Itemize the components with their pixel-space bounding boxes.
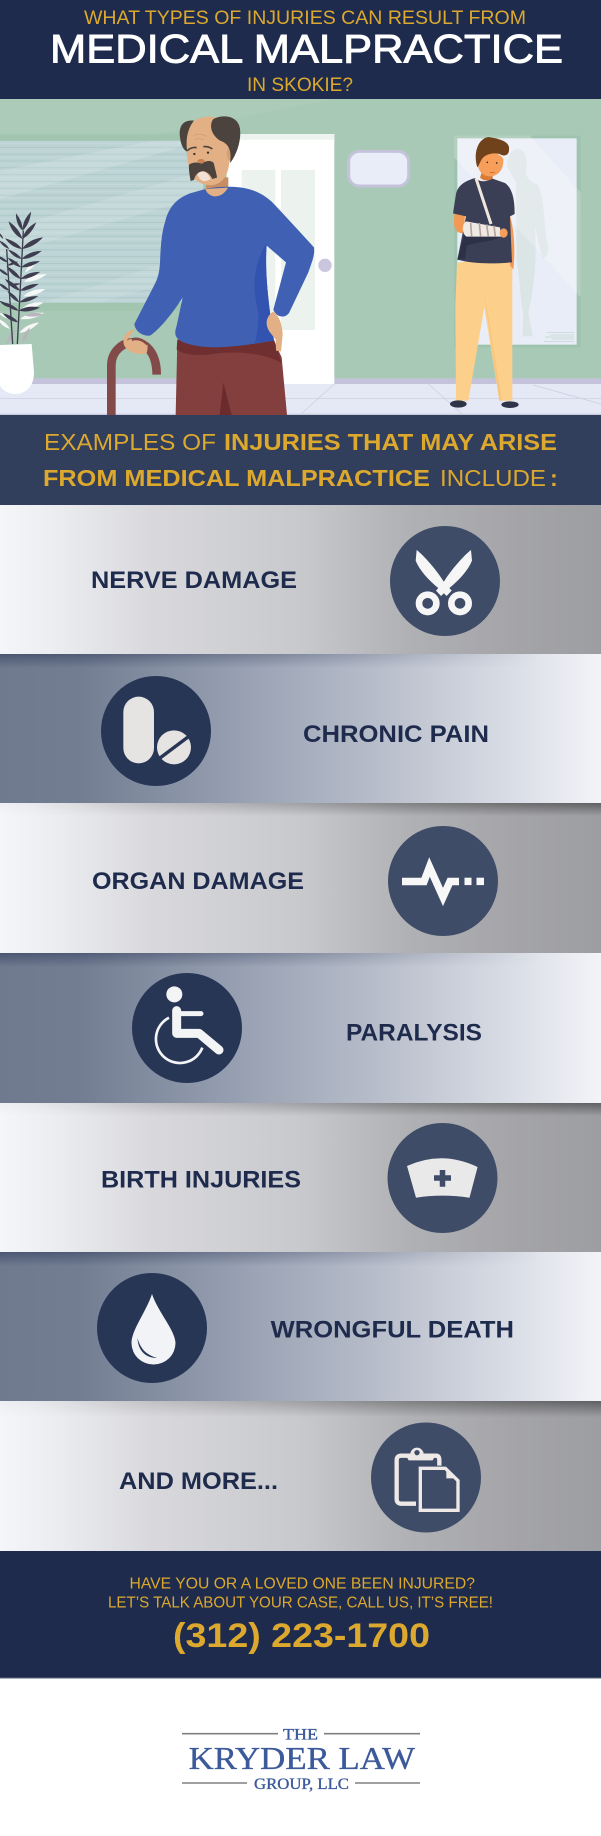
banner text line 2: FROM MEDICAL MALPRACTICE [43,465,430,491]
potted plant [0,211,48,394]
wall poster [454,136,581,347]
neck and head [480,172,493,181]
band: paralysis [0,953,601,1103]
logo: Kryder Law Group: KRYDER LAW [189,1740,416,1776]
band: wrongful death [0,1252,601,1401]
band: and more [0,1401,601,1551]
sling strap [476,178,491,224]
icon: heartbeat [388,826,498,936]
head [186,117,232,185]
heading: in Skokie: IN SKOKIE? [247,74,353,96]
hand [500,228,508,238]
illustration: hospital scene [0,99,601,415]
label: CHRONIC PAIN [303,721,489,748]
icon: scissors [390,526,500,636]
banner text line 2: : [550,465,558,491]
shirt [453,178,515,263]
sweater [134,187,314,347]
label: ORGAN DAMAGE [92,868,304,895]
logo: Kryder Law Group: GROUP, LLC [254,1776,349,1793]
band: nerve damage [0,505,601,654]
heading: what types of injuries: WHAT TYPES OF INJURIES CAN RESULT FROM [84,7,526,29]
shoes [450,400,467,408]
plant pot [0,344,34,394]
label: WRONGFUL DEATH [271,1317,514,1344]
call line: LET’S TALK ABOUT YOUR CASE, CALL US, IT’S FREE! [108,1594,493,1612]
sweater shading [255,242,274,343]
header banner [0,0,601,99]
logo: Kryder Law Group [182,1726,420,1793]
boy with arm sling [450,137,519,408]
banner text line 1: EXAMPLES OF [44,429,216,455]
logo: Kryder Law Group: THE [283,1726,318,1744]
icon: drop [97,1273,207,1383]
label: AND MORE... [119,1468,278,1495]
arm cast [463,221,501,237]
door knob [318,259,332,272]
question line: HAVE YOU OR A LOVED ONE BEEN INJURED? [130,1575,475,1592]
pants [176,341,287,415]
icon: pills [101,676,211,786]
wall and floor [0,99,601,415]
window with blinds [0,134,207,311]
mouth [197,171,211,181]
wall sign [349,151,409,186]
label: PARALYSIS [346,1020,482,1047]
elderly man with cane [111,116,314,415]
label: NERVE DAMAGE [91,567,297,594]
band: chronic pain [0,654,601,803]
banner text line 2: INCLUDE [440,465,546,491]
footer call to action [0,1551,601,1678]
banner: examples of injuries [0,415,601,505]
banner text line 2 [43,465,558,491]
title: medical malpractice: MEDICAL MALPRACTICE [50,28,563,72]
arm [510,216,514,270]
anatomy silhouette [507,149,548,336]
pants [455,261,512,401]
icon: clipboard [371,1422,481,1532]
icon: wheelchair [132,973,242,1083]
cane [111,342,157,415]
hand on cane [123,329,148,354]
neck [205,177,228,190]
collar [205,188,228,196]
mustache [189,161,217,181]
hair [211,116,240,163]
door [227,134,334,384]
icon: nurse cap [388,1123,498,1233]
band: organ damage [0,803,601,953]
band: birth injuries [0,1103,601,1252]
label: BIRTH INJURIES [101,1167,301,1194]
face details [187,147,212,151]
hand on hip [267,312,283,351]
banner text line 1 [44,429,557,455]
banner text line 1: INJURIES THAT MAY ARISE [224,429,557,455]
phone number: (312) 223-1700 [173,1617,430,1655]
